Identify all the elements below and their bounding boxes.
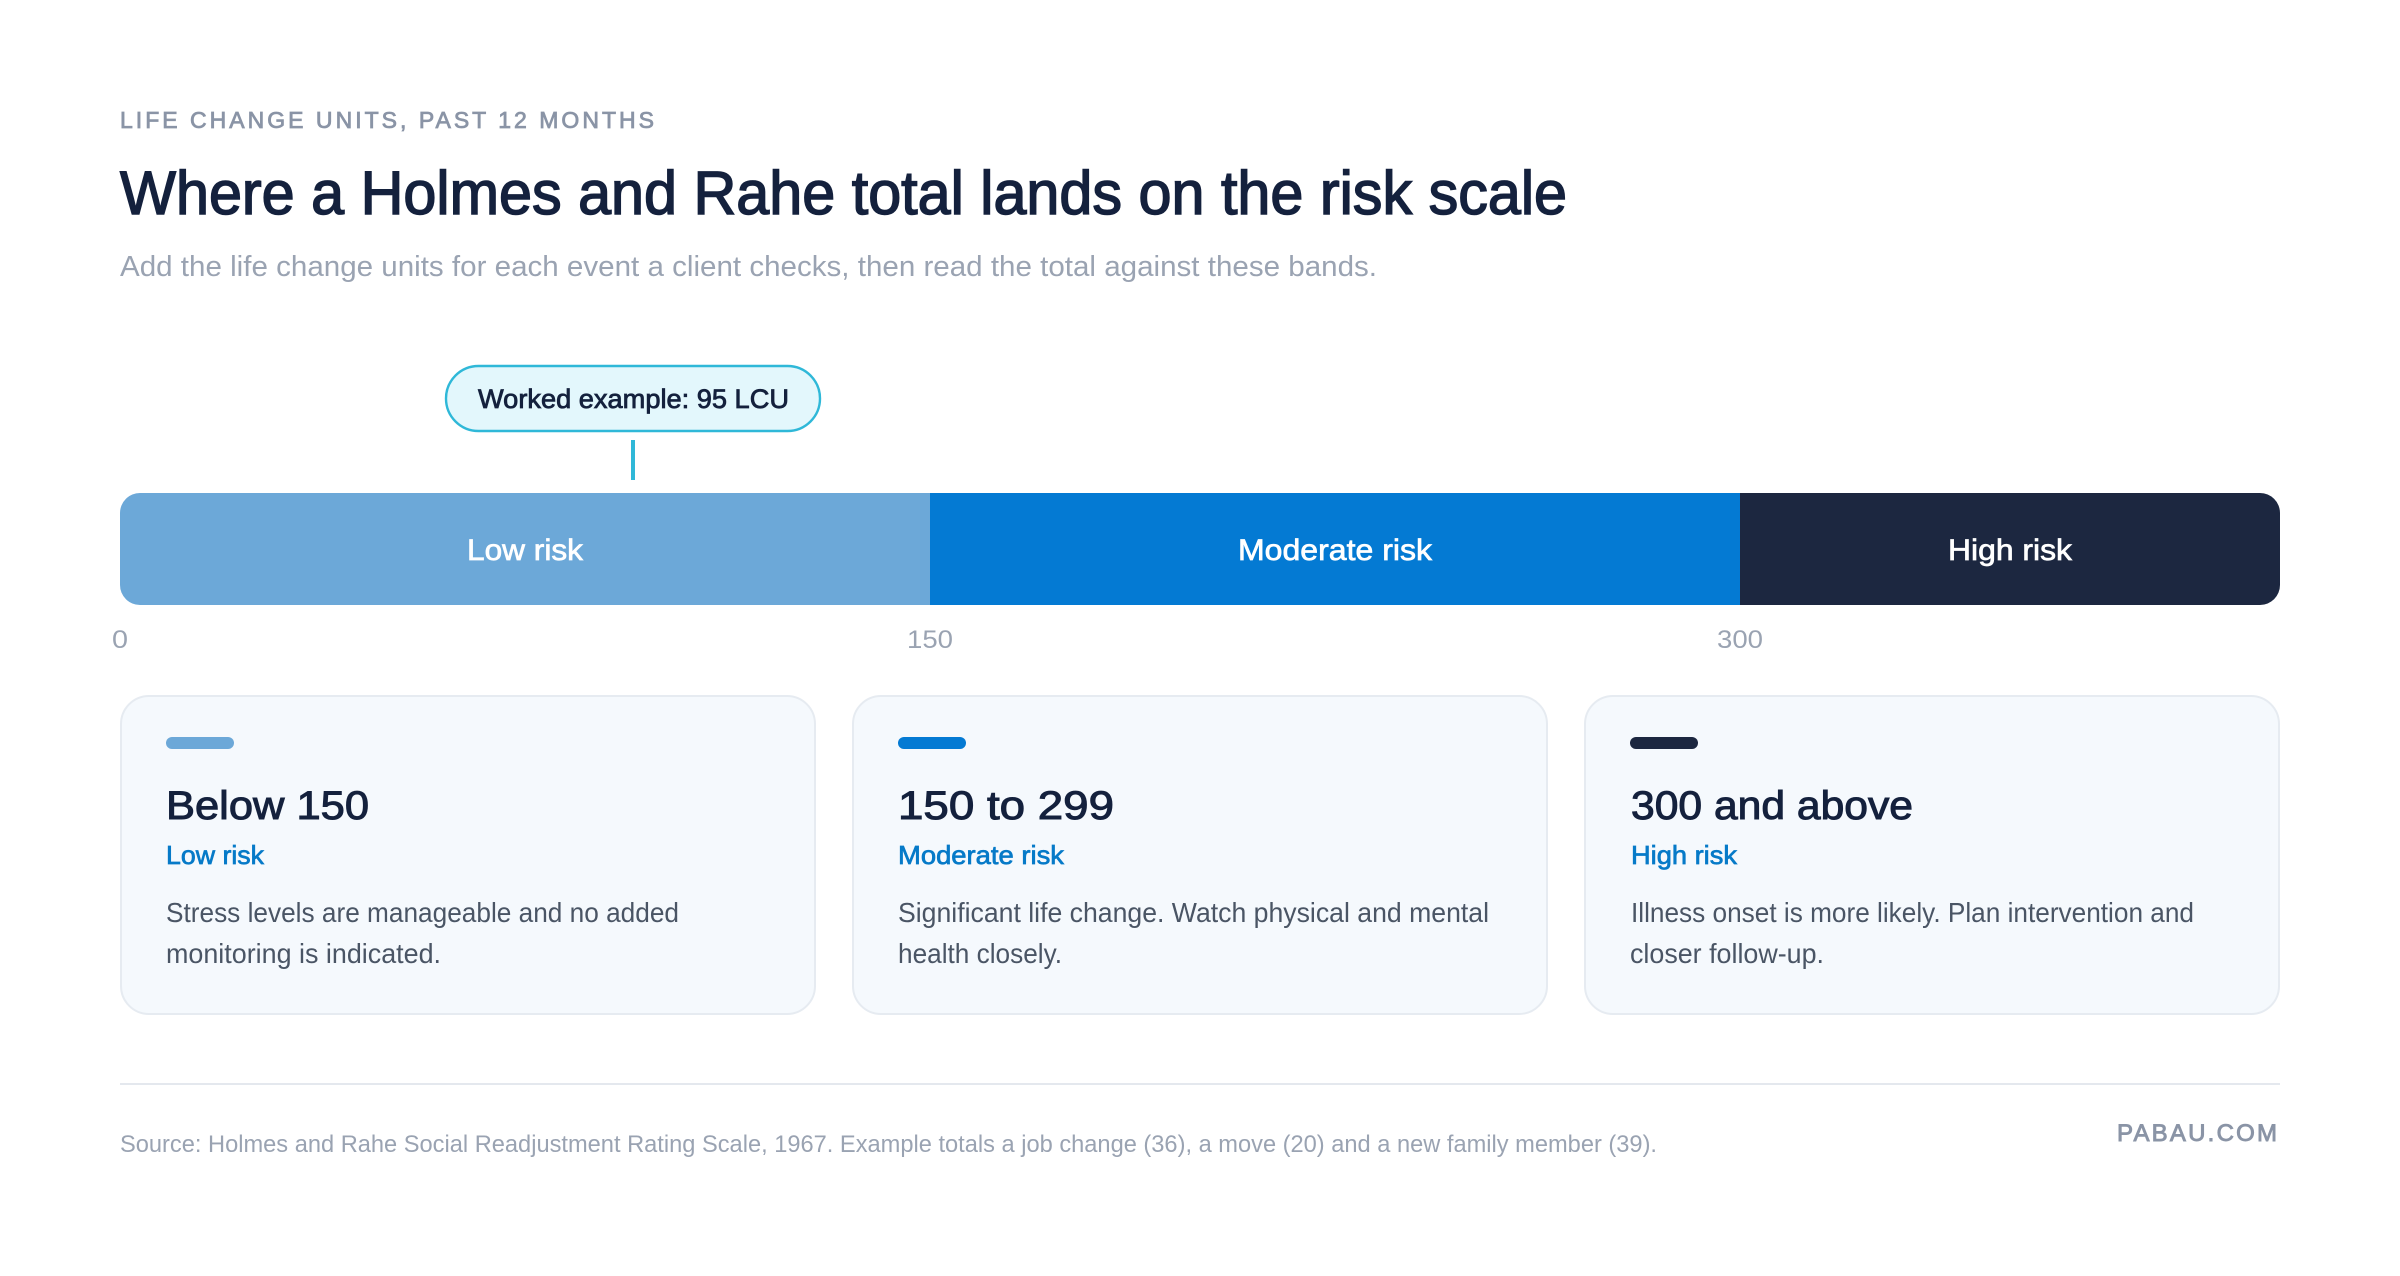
axis labels: 150 [907, 626, 953, 654]
card text: high risk [1630, 897, 2194, 969]
card text: low risk [166, 897, 679, 969]
card text: high risk: Illness onset is more likely. Plan intervention and [1631, 897, 2194, 928]
card heading: 300 and above: 300 and above [1631, 784, 1913, 828]
segment: moderate risk: Moderate risk [1238, 534, 1433, 567]
card heading: below 150: Below 150 [166, 784, 369, 828]
panel: 150 to 299 [853, 696, 1547, 1014]
card text: moderate risk [898, 897, 1489, 969]
panel: below 150 [121, 696, 815, 1014]
segment: moderate risk [930, 493, 1740, 605]
card text: moderate risk: Significant life change. Watch physical and mental [898, 897, 1489, 928]
title: Where a Holmes and Rahe total lands on the risk scale [120, 159, 1567, 227]
card text: low risk: Stress levels are manageable and no added [166, 897, 679, 928]
marker tick at 95 LCU [631, 440, 635, 480]
risk scale bar [120, 493, 2280, 605]
segment: high risk [1740, 493, 2280, 605]
card label: high risk: High risk [1631, 840, 1738, 870]
accent pill: moderate [898, 737, 966, 749]
card text: moderate risk: health closely. [898, 938, 1062, 969]
callout: worked example [446, 366, 820, 431]
card heading: 150 to 299: 150 to 299 [898, 784, 1114, 828]
card text: low risk: monitoring is indicated. [166, 938, 441, 969]
source note: Source: Holmes and Rahe Social Readjustment Rating Scale, 1967. Example totals a job change (36), a move (20) and a new family member (39). [120, 1131, 1657, 1158]
axis labels: 300 [1717, 626, 1763, 654]
axis labels [112, 626, 1763, 654]
segment: high risk: High risk [1948, 534, 2073, 567]
eyebrow: LIFE CHANGE UNITS, PAST 12 MONTHS [120, 107, 654, 133]
panel: 300 and above [1585, 696, 2279, 1014]
accent pill: low [166, 737, 234, 749]
card text: high risk: closer follow-up. [1630, 938, 1824, 969]
brand: PABAU.COM [2117, 1120, 2277, 1147]
card label: low risk: Low risk [166, 840, 265, 870]
axis labels: 0 [112, 626, 128, 654]
accent pill: high [1630, 737, 1698, 749]
callout: worked example: Worked example: 95 LCU [478, 384, 789, 414]
card label: moderate risk: Moderate risk [898, 840, 1065, 870]
segment: low risk [120, 493, 930, 605]
subtitle: Add the life change units for each event a client checks, then read the total against these bands. [120, 251, 1377, 283]
segment: low risk: Low risk [467, 534, 584, 567]
